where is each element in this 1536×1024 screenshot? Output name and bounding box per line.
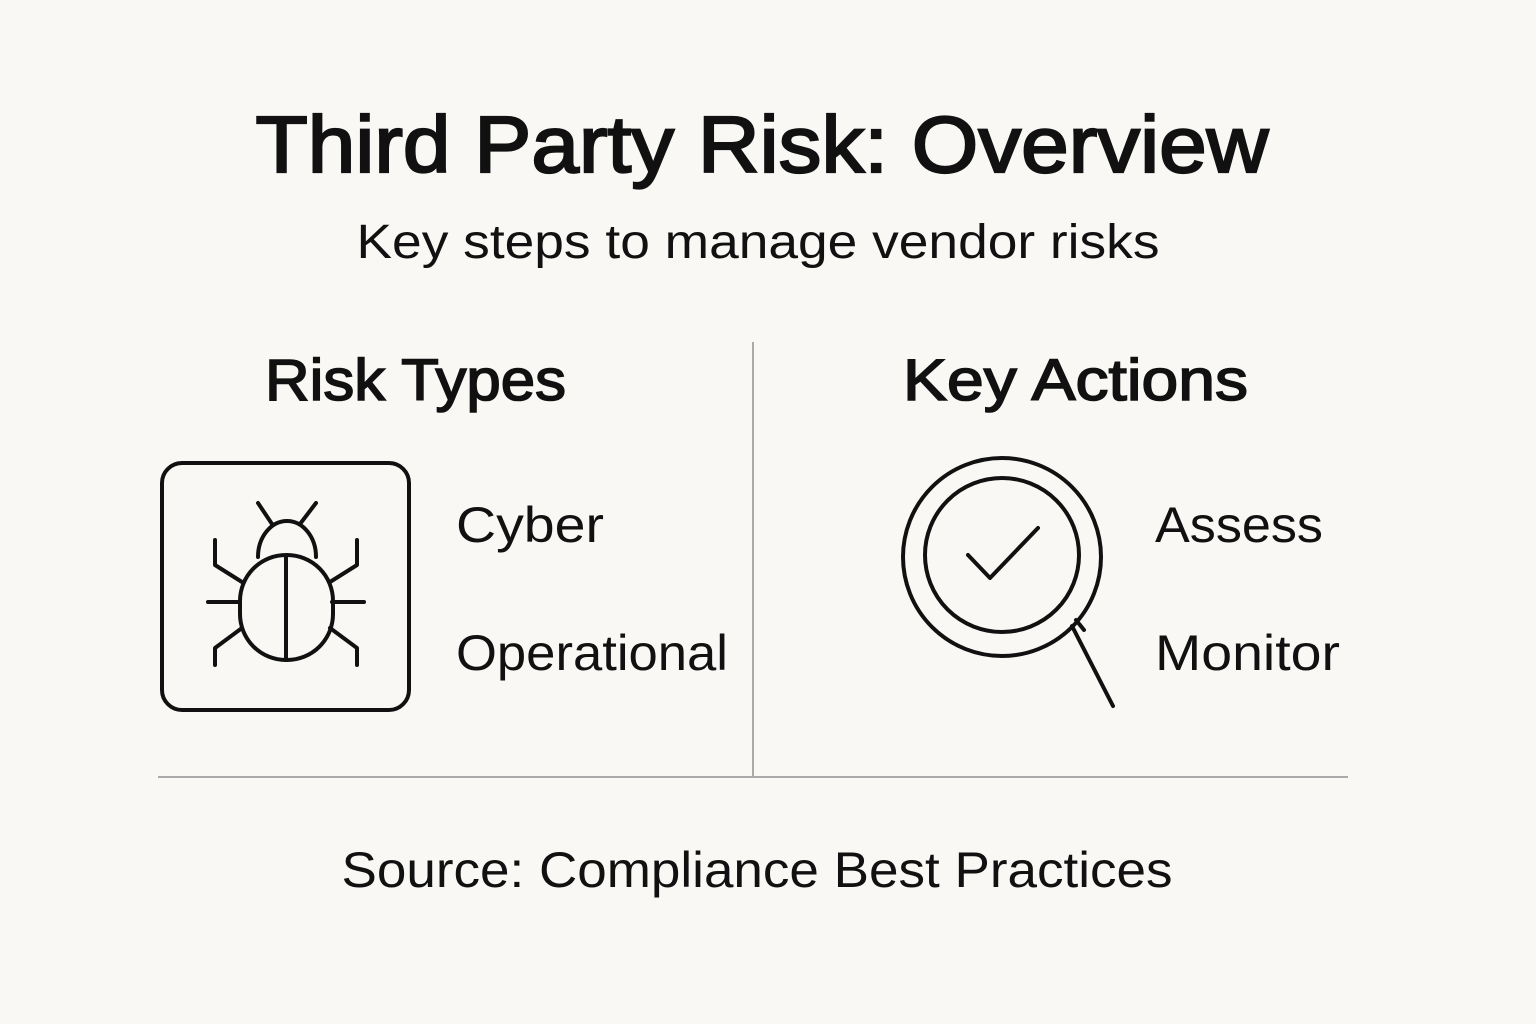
panel: key actions — [903, 348, 1340, 706]
icon: magnifier check — [903, 458, 1113, 706]
label: operational: Operational — [456, 625, 728, 681]
subtitle: Key steps to manage vendor risks — [356, 216, 1160, 269]
icon: bug — [162, 463, 409, 710]
label: assess: Assess — [1155, 497, 1323, 553]
title: Third Party Risk: Overview — [256, 100, 1269, 189]
source: Source: Compliance Best Practices — [342, 842, 1172, 898]
label: monitor: Monitor — [1155, 625, 1340, 681]
heading: key actions: Key Actions — [903, 348, 1248, 413]
panel: risk types — [162, 348, 728, 710]
label: cyber: Cyber — [456, 497, 604, 553]
heading: risk types: Risk Types — [265, 348, 566, 413]
